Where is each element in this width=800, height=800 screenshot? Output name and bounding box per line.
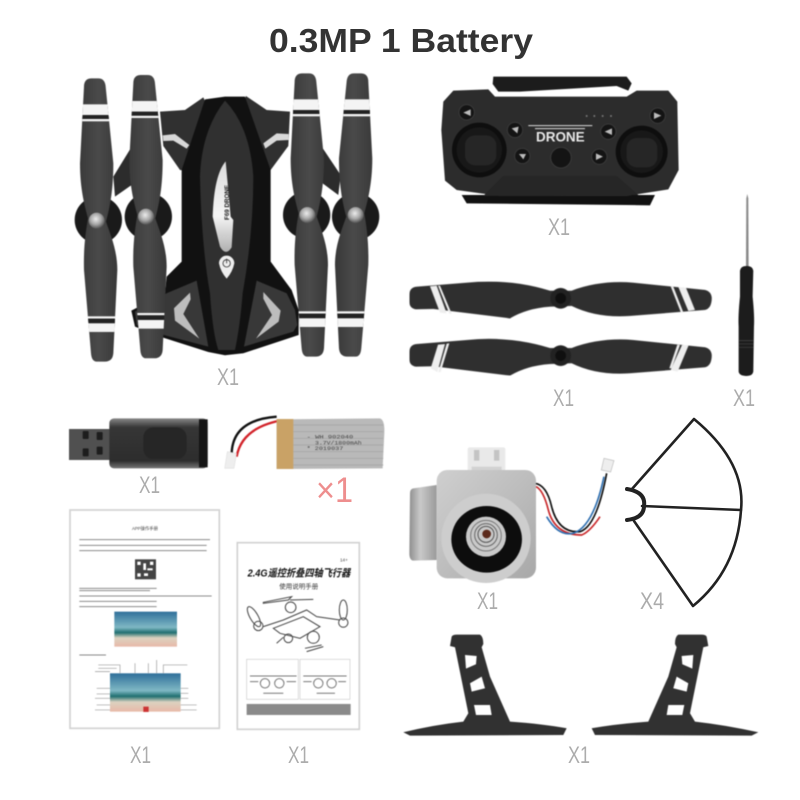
label: battery quantity: ×1 [316,471,353,510]
wires [535,473,607,535]
cell text [307,434,362,452]
page [237,543,359,729]
camera [409,447,614,583]
right leg [592,635,758,736]
app screenshot [114,612,177,647]
hub caps [89,207,364,229]
label: app manual quantity: X1 [130,742,151,769]
app manual [70,510,219,728]
footer bar [247,704,351,715]
screwdriver [738,194,754,376]
bottom edge [462,195,655,205]
rear cylinder [409,485,437,561]
logo text: DRONE [536,130,585,145]
top propeller [409,282,712,318]
controller sketches [250,676,347,693]
shoulder chevrons [163,133,289,149]
text lines [79,540,212,607]
propeller 1 [77,78,120,362]
label: guard quantity: X4 [640,588,664,615]
power button [219,256,234,279]
indicator dots [586,115,612,117]
manual subtitle: 使用说明手册 [279,582,319,591]
QR code [135,559,156,579]
label: screwdriver quantity: X1 [733,385,755,412]
manual title: 2.4G遥控折叠四轴飞行器 [247,568,352,580]
right joystick [616,126,668,178]
tape edge [277,419,293,469]
cell text: 3.7V/1800mAh [315,439,362,446]
remote controller [441,77,679,205]
propeller 4 [332,73,376,357]
propeller 2 [126,75,169,358]
plug [69,429,111,460]
lower wings [135,281,297,347]
label: instruction manual quantity: X1 [288,742,309,769]
mount [468,447,505,481]
logo lines [528,126,592,129]
casing [109,418,208,468]
model label: F69 DRONE [224,184,231,220]
section label [79,653,106,656]
lens barrel [451,506,522,573]
spare propellers [409,282,712,376]
label: landing gear quantity: X1 [568,742,590,769]
motor hubs [75,191,379,244]
silver plate [213,161,233,252]
propeller 3 [287,73,331,357]
callouts [95,660,197,710]
age mark: 14+ [340,557,348,562]
annotated screenshot [110,673,181,712]
label: USB quantity: X1 [139,472,160,499]
USB charger [69,418,208,468]
lens [466,517,506,557]
label: drone quantity: X1 [217,364,239,391]
connector [225,452,237,468]
wire connector [601,458,614,472]
cell text: * 2019037 [307,445,343,452]
battery [225,417,384,469]
rear arms [113,147,341,197]
front ring [441,494,531,583]
main body [131,97,299,355]
upper shoulders [160,96,290,173]
folded drone [75,73,379,362]
line drawing of drone [245,597,348,652]
instruction manual [237,543,359,729]
buttons [459,105,665,168]
phone clamp [493,77,632,92]
bottom propeller [409,339,712,376]
left leg [403,635,567,736]
controller shell [441,89,679,196]
wires [232,417,280,457]
label: remote quantity: X1 [548,214,570,241]
left joystick [452,123,507,177]
button glyphs [463,109,661,160]
controller boxes [247,659,350,699]
cell text: - WH 902040 [307,434,354,441]
page [70,510,219,728]
lower chevrons [174,292,281,339]
page title: APP操作手册 [132,525,159,532]
cell [277,418,384,469]
label: camera quantity: X1 [477,588,498,615]
label: propellers quantity: X1 [553,385,574,412]
landing gear [403,635,758,736]
title: 0.3MP 1 Battery [269,22,534,59]
housing [437,470,536,578]
central shell [200,101,253,350]
contacts [83,431,103,456]
propeller guard [627,419,741,606]
